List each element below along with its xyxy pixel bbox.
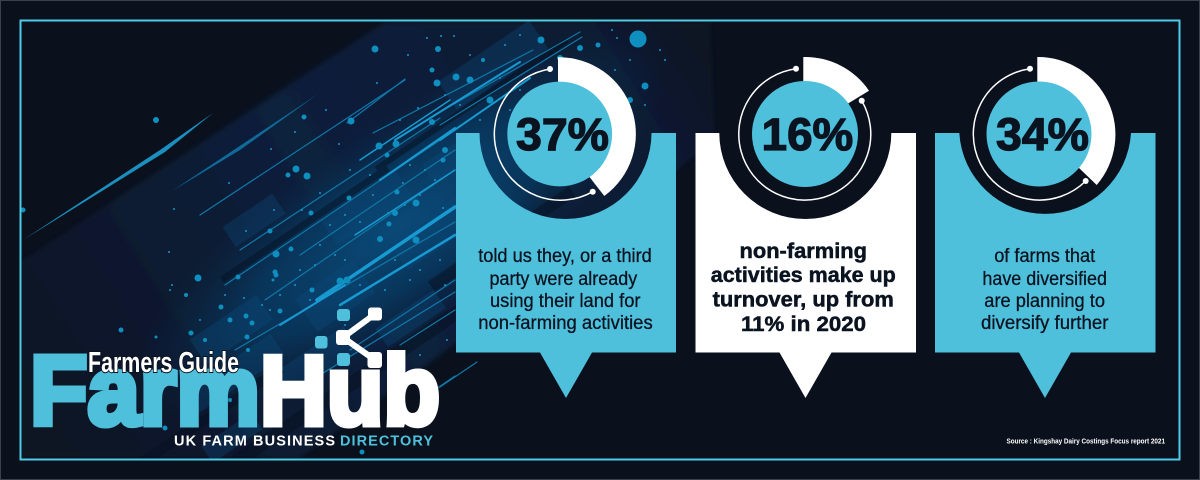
remainder arc (973, 66, 1089, 200)
callout shape (935, 133, 1156, 398)
inner circle (507, 82, 612, 186)
body text: activities make up (711, 264, 896, 287)
body text: turnover, up from (713, 288, 894, 312)
callout shape (456, 133, 676, 398)
body text: 11% in 2020 (741, 313, 866, 336)
body text (981, 245, 1109, 334)
donut segment (803, 57, 869, 134)
wordmark Farm: Farm (30, 336, 260, 446)
inner circle (986, 82, 1092, 186)
decorative light streak artwork (20, 20, 760, 467)
body text: told us they, or a third (478, 245, 652, 267)
body text (711, 240, 896, 336)
source note: Source : Kingshay Dairy Costings Focus report 2021 (1006, 438, 1165, 446)
percentage: 37% (516, 109, 609, 160)
panel: 16% (696, 57, 916, 398)
remainder arc (739, 66, 871, 200)
body text: of farms that (994, 245, 1096, 267)
percentage: 16% (762, 109, 853, 160)
donut segment (1037, 57, 1115, 185)
thin streaks (23, 32, 582, 400)
remainder arc (494, 66, 596, 200)
logo: Farmers Guide FarmHub (30, 308, 440, 450)
panel: 34% (935, 57, 1156, 398)
callout shape (696, 133, 916, 398)
particles (20, 30, 648, 454)
percentage: 34% (996, 109, 1089, 160)
body text: have diversified (982, 268, 1107, 290)
inner circle (752, 81, 858, 187)
tagline: UK FARM BUSINESS (174, 434, 335, 450)
body text: party were already (490, 268, 637, 290)
body text: diversify further (981, 312, 1109, 334)
wordmark Hub: Hub (260, 336, 440, 446)
body text: are planning to (984, 290, 1105, 312)
Farmers Guide: Farmers Guide (88, 347, 239, 379)
panel: 37% (456, 57, 676, 398)
body text: using their land for (490, 290, 641, 312)
body text: non-farming activities (478, 312, 653, 334)
donut segment (558, 57, 636, 196)
tagline: DIRECTORY (340, 434, 433, 450)
body text (478, 245, 653, 334)
icon: network nodes (315, 308, 382, 368)
tagline (174, 434, 433, 450)
body text: non-farming (740, 240, 867, 263)
